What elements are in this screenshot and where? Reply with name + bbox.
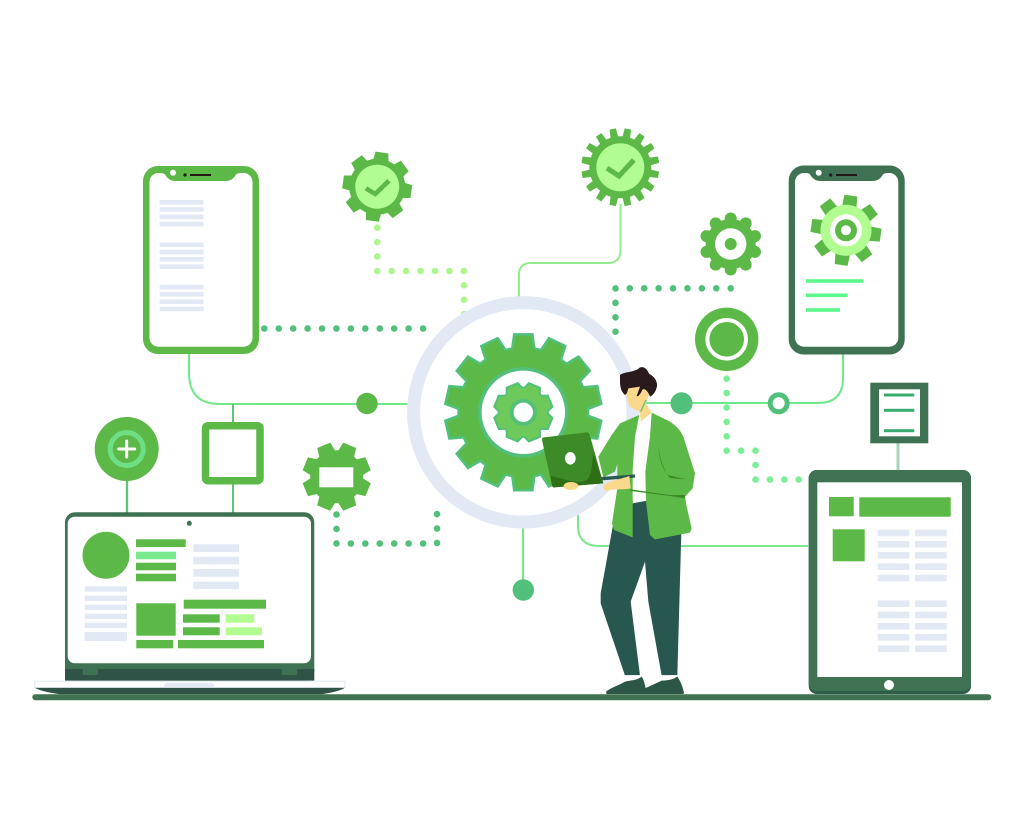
- plus icon: [95, 417, 159, 481]
- legs and shoes: [601, 499, 684, 694]
- jacket folds: [630, 445, 686, 498]
- gear: with white rectangle: [302, 442, 372, 512]
- ground line: [32, 694, 991, 700]
- shoes: [606, 677, 684, 694]
- laptop base: [34, 687, 346, 694]
- phone text lines: [160, 200, 204, 311]
- small inner gear: [493, 382, 554, 443]
- socks: [625, 675, 677, 681]
- node: left green dot: [356, 393, 378, 414]
- connector lines: [127, 204, 898, 582]
- face line: [641, 400, 646, 412]
- tablet: [809, 470, 971, 694]
- tablet text rows: [878, 530, 947, 652]
- shirt: [633, 412, 653, 503]
- trousers: [601, 499, 682, 676]
- node: small ring: [770, 395, 787, 412]
- large gear: [445, 334, 602, 490]
- person with laptop: [542, 367, 695, 694]
- target circle icon: [695, 308, 758, 371]
- jacket left panel and arm: [598, 415, 639, 537]
- laptop: [34, 512, 346, 694]
- face and neck: [626, 385, 652, 422]
- gear: check mark, top: [581, 128, 659, 206]
- laptop screen content: [82, 532, 266, 648]
- hands: [564, 476, 631, 491]
- upper body: [542, 367, 695, 539]
- central gear ring: [414, 303, 633, 522]
- tablet green blocks: [829, 497, 951, 561]
- gear: check mark, left: [342, 151, 412, 222]
- phone: left: [143, 166, 259, 354]
- dotted connectors: [264, 228, 799, 543]
- jacket right panel: [645, 413, 695, 539]
- held laptop: [542, 432, 603, 487]
- phone text lines: [806, 279, 863, 312]
- hair: [620, 367, 657, 397]
- document icon: [870, 383, 928, 443]
- node: right green dot: [670, 392, 692, 414]
- square icon: [206, 426, 260, 481]
- node: bottom green dot: [513, 579, 534, 601]
- phone gear icon: [810, 195, 882, 266]
- gear: right, rounded teeth: [706, 218, 756, 270]
- phone: right: [789, 166, 905, 354]
- keyboard edge of held laptop: [602, 476, 635, 479]
